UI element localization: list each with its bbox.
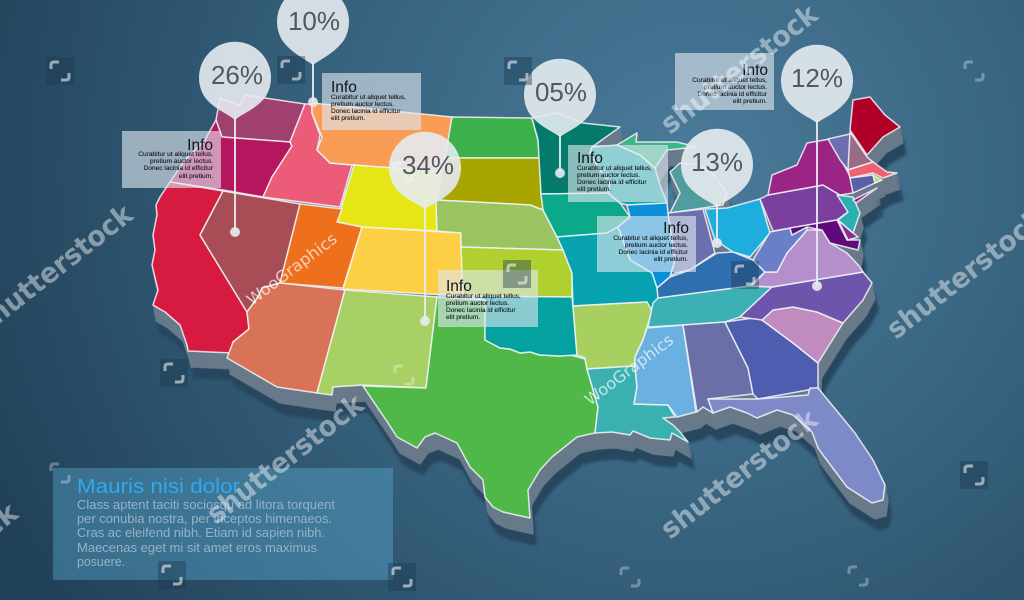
state: Illinois — [618, 203, 675, 288]
info box: New Mexico: elit pretium. — [446, 314, 480, 321]
info box: north east: pretium auctor lectus. — [704, 84, 767, 91]
state: Wyoming — [337, 165, 445, 231]
text panel: Mauris nisi dolor: per conubia nostra, per inceptos himenaeos. — [77, 512, 332, 526]
state: North Carolina — [740, 272, 872, 323]
state: Colorado — [343, 227, 463, 296]
state: Utah — [280, 204, 362, 288]
state: Kansas — [461, 247, 572, 297]
state: South Carolina — [762, 307, 843, 363]
info box: north east: Info — [742, 62, 768, 79]
pin: 34%: 34% — [402, 150, 454, 180]
pin: 05%: 05% — [535, 77, 587, 107]
state: Arkansas — [573, 302, 652, 369]
info box: north east — [675, 53, 774, 110]
state: Florida — [708, 388, 885, 503]
state: Vermont — [828, 134, 853, 170]
state: Delaware — [838, 220, 858, 240]
state: Lower Michigan — [670, 163, 727, 213]
state: Massachusetts — [848, 162, 897, 178]
state: Alabama — [683, 322, 753, 413]
pin: 12%: 12% — [791, 63, 843, 93]
text panel: Mauris nisi dolor: Class aptent taciti sociosqu ad litora torquent — [77, 498, 336, 512]
state: Ohio — [705, 199, 770, 257]
state: Tennessee — [648, 286, 772, 327]
state: Idaho — [263, 104, 352, 207]
shutterstock watermarks: shutterstock — [200, 387, 371, 531]
info box: Oregon — [122, 131, 221, 188]
info box: Montana: elit pretium. — [331, 115, 365, 122]
WooGraphics watermarks: WooGraphics — [581, 330, 677, 409]
state: New Mexico — [317, 290, 437, 395]
state: South Dakota — [436, 158, 543, 210]
state: New Hampshire — [848, 132, 873, 170]
state: Iowa — [541, 193, 630, 237]
info box: Montana: pretium auctor lectus. — [331, 101, 394, 108]
state: Rhode Island — [873, 175, 882, 183]
state: Montana — [312, 103, 452, 172]
state: Minnesota — [532, 113, 620, 194]
info box: Minnesota: Curabitur ut aliquet tellus, — [577, 165, 652, 172]
info box: north east: elit pretium. — [733, 98, 767, 105]
info box: Illinois: Info — [663, 220, 689, 237]
info box: Illinois: Curabitur ut aliquet tellus, — [613, 235, 688, 242]
state: Wisconsin — [590, 145, 667, 205]
info box: Oregon: pretium auctor lectus. — [150, 158, 213, 165]
info box: New Mexico: pretium auctor lectus. — [446, 300, 509, 307]
map of the United States — [152, 95, 900, 518]
state: Connecticut — [850, 175, 875, 193]
pin: 34% — [389, 132, 461, 326]
text panel: Mauris nisi dolor: Cras ac eleifend nibh. Etiam id sapien nibh. — [77, 526, 325, 540]
info box: Minnesota — [568, 145, 668, 202]
state: Arizona — [227, 283, 345, 393]
pin: 10%: 10% — [288, 6, 340, 36]
state: Upper Michigan — [617, 133, 697, 168]
state: Maine — [850, 97, 900, 155]
info box: Illinois — [597, 216, 696, 272]
info box: Minnesota: elit pretium. — [577, 186, 611, 193]
state: New York — [768, 139, 853, 195]
info box: north east: Curabitur ut aliquet tellus, — [692, 77, 767, 84]
text panel: Mauris nisi dolor: posuere. — [77, 555, 125, 569]
info box: New Mexico: Info — [446, 278, 472, 295]
state: Virginia — [752, 230, 863, 287]
text panel: Mauris nisi dolor: Mauris nisi dolor — [77, 476, 240, 498]
info box: New Mexico: Curabitur ut aliquet tellus, — [446, 293, 521, 300]
state: West Virginia — [753, 227, 807, 272]
info box: Montana — [322, 73, 421, 130]
state: Mississippi — [634, 325, 696, 417]
info box: Oregon: elit pretium. — [179, 173, 213, 180]
info box: Montana: Info — [331, 79, 357, 96]
info box: Oregon: Curabitur ut aliquet tellus, — [138, 151, 213, 158]
state: Maryland — [790, 220, 860, 250]
info box: Minnesota: Info — [577, 150, 603, 167]
state: Long Island — [853, 188, 877, 203]
WooGraphics watermarks: WooGraphics — [243, 229, 341, 309]
state: Washington — [216, 95, 305, 142]
info box: Minnesota: Donec lacinia id efficitur — [577, 179, 647, 186]
text panel: Mauris nisi dolor — [53, 468, 393, 580]
pin: 13%: 13% — [691, 147, 743, 177]
state: Oregon — [170, 120, 292, 197]
info box: Oregon: Info — [187, 137, 213, 154]
state: Pennsylvania — [760, 185, 848, 231]
shutterstock watermarks: shutterstock — [654, 402, 825, 546]
state: Texas — [363, 297, 598, 518]
pin: 13% — [681, 129, 753, 248]
state: Georgia — [725, 317, 818, 399]
text panel: Mauris nisi dolor: Maecenas eget mi sit amet eros maximus — [77, 541, 317, 555]
pin: 05% — [524, 59, 596, 178]
pin: 10% — [277, 0, 349, 107]
info box: north east: Donec lacinia id efficitur — [697, 91, 768, 98]
info box: New Mexico: Donec lacinia id efficitur — [446, 307, 516, 314]
pin: 26%: 26% — [211, 60, 263, 90]
state: Indiana — [668, 209, 715, 277]
state: Louisiana — [587, 366, 688, 442]
info box: Montana: Donec lacinia id efficitur — [331, 108, 401, 115]
state: North Dakota — [445, 117, 540, 158]
state: Nebraska — [436, 200, 563, 250]
pin: 26% — [199, 42, 271, 237]
info box: Minnesota: pretium auctor lectus. — [577, 172, 640, 179]
state: Oklahoma — [463, 296, 577, 356]
state: California — [152, 182, 249, 353]
state: Missouri — [557, 227, 660, 310]
state: New Jersey — [837, 195, 860, 233]
state: Nevada — [200, 191, 300, 312]
WooGraphics watermarks — [243, 229, 677, 409]
pin: 12% — [781, 45, 853, 291]
info box: Illinois: elit pretium. — [654, 256, 688, 263]
state: Kentucky — [657, 252, 765, 298]
info box: New Mexico — [438, 270, 538, 327]
info box: Montana: Curabitur ut aliquet tellus, — [331, 94, 406, 101]
info box: Illinois: Donec lacinia id efficitur — [618, 249, 689, 256]
info box: Illinois: pretium auctor lectus. — [625, 242, 688, 249]
info box: Oregon: Donec lacinia id efficitur — [143, 165, 214, 172]
